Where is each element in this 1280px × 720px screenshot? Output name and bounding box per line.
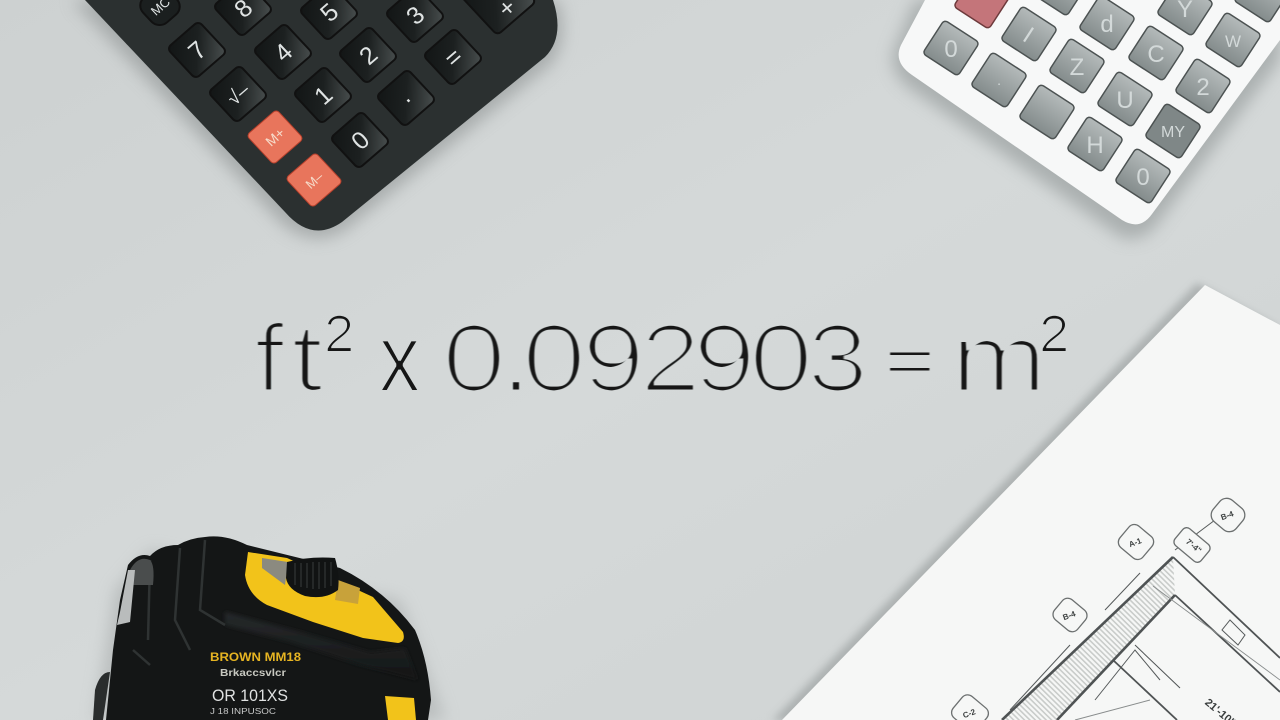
formula: 2 [640, 304, 701, 412]
calculator keys: black: 0 [346, 126, 375, 155]
calculator keys: black: √– [223, 79, 255, 110]
calculator keys: black: 7 [183, 36, 212, 65]
dimension lines [1010, 520, 1245, 720]
plan tag text: C-2 [962, 707, 977, 720]
formula: 9 [693, 305, 756, 412]
calculator keys: black: 3 [401, 1, 430, 30]
tape side clip [93, 672, 110, 720]
formula: = [885, 326, 935, 395]
calculator keys: grey: . [997, 72, 1001, 88]
formula: x [379, 304, 420, 411]
calculator keys: grey: I [1018, 22, 1038, 48]
tape grey cap [130, 559, 154, 585]
plan tag text [962, 509, 1238, 720]
tape metal edge [117, 570, 135, 625]
tape label: BROWN MM18 [210, 652, 302, 664]
calculator key: red [953, 0, 1011, 29]
calculator keys: black: 2 [354, 41, 383, 70]
yellow panel [245, 552, 404, 643]
white calculator [892, 0, 1280, 239]
formula: 0 [749, 305, 813, 412]
calculator keys: grey: MY [1161, 124, 1185, 141]
calculator keys: grey: 2 [1196, 74, 1210, 101]
tape body sheen [225, 612, 418, 680]
calculator keys: grey: C [1147, 41, 1165, 68]
formula: 9 [582, 305, 645, 412]
formula: . [500, 305, 532, 412]
calculator keys: grey: U [1116, 87, 1134, 114]
calculator keys: black: 1 [309, 81, 338, 110]
plan tag text: B-4 [1062, 609, 1077, 622]
formula: 2 [1039, 306, 1069, 363]
calculator keys: black: = [439, 43, 469, 73]
calculator keys: grey: H [1086, 132, 1104, 159]
calculator keys: grey: Z [1070, 54, 1084, 81]
tape slider [286, 558, 339, 597]
tape label: Brkaccsvlcr [220, 668, 286, 679]
formula: f [254, 304, 285, 411]
formula: 2 [324, 306, 354, 363]
tape grip ribs [133, 540, 225, 665]
plan tag text: A-1 [1128, 536, 1143, 549]
tape label [210, 652, 302, 716]
calculator keys: orange: M+ [262, 125, 288, 149]
formula [254, 304, 1069, 412]
calculator keys: grey [922, 0, 1280, 204]
formula: m [951, 305, 1047, 412]
formula: 0 [522, 305, 586, 412]
calculator keys: black: . [392, 83, 416, 108]
formula: 0 [442, 305, 506, 412]
tape measure [93, 536, 445, 720]
tape label: OR 101XS [212, 687, 288, 705]
calculator keys: orange: M– [302, 168, 327, 192]
lower yellow patch [385, 696, 416, 720]
calculator keys: grey: 0 [944, 36, 958, 63]
blueprint sheet [772, 283, 1280, 720]
plan tags [949, 495, 1248, 720]
calculator keys: black [136, 0, 536, 169]
calculator keys: orange [246, 109, 343, 208]
black calculator [72, 0, 562, 238]
plan walls [1002, 557, 1280, 720]
brown window [335, 580, 360, 604]
grey window [262, 558, 288, 585]
calculator keys: grey: d [1100, 11, 1114, 38]
formula: 3 [807, 304, 868, 411]
formula: t [291, 304, 324, 412]
calculator keys: black: 4 [269, 38, 299, 67]
plan tag text: B-4 [1220, 509, 1235, 522]
tape label: J 18 INPUSOC [210, 707, 276, 716]
calculator keys: grey: 0 [1136, 164, 1150, 191]
hatched wall fill [1020, 570, 1182, 720]
plan tag text: 7'-4" [1184, 537, 1203, 555]
slider ridges [295, 562, 331, 589]
calculator keys: grey: W [1225, 32, 1241, 51]
